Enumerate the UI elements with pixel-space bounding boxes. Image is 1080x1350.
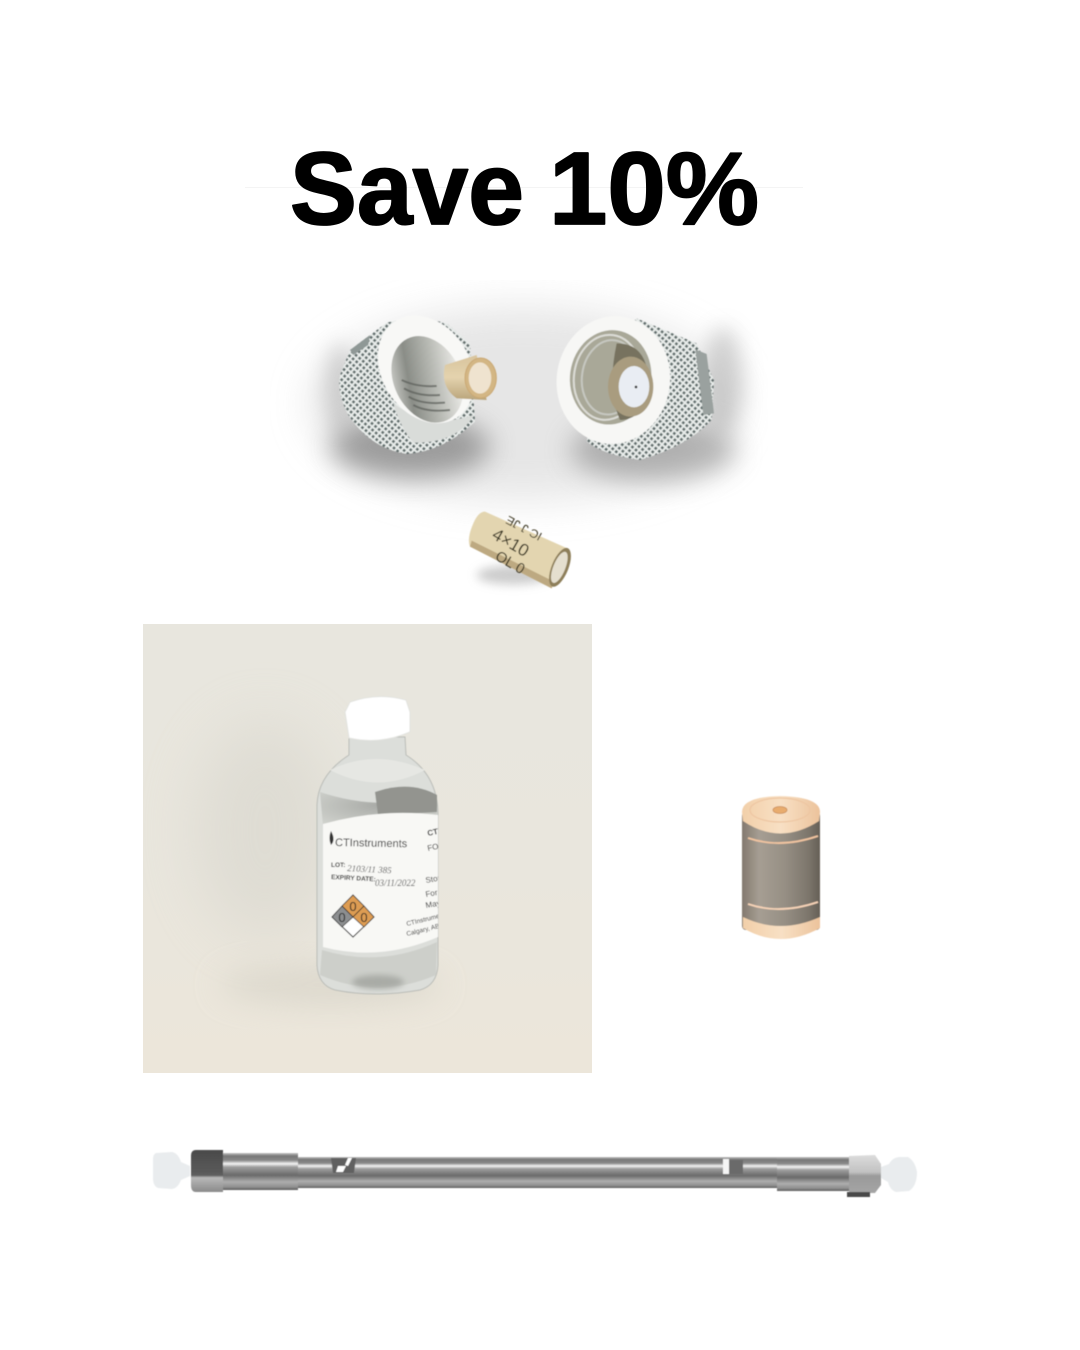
- bottle label: LOT:: [331, 862, 345, 869]
- right sleeve: [777, 1157, 850, 1191]
- photo backdrop: [143, 624, 592, 1073]
- bottle label: EXPIRY DATE:: [331, 874, 376, 883]
- bottle label: May: [425, 898, 441, 910]
- bottle label: CTInstruments: [335, 837, 408, 850]
- bottle label: For: [425, 888, 438, 899]
- loose cartridge: IC J JE: [504, 513, 544, 543]
- product photo: steel guard cartridge: [742, 796, 820, 939]
- bottle label: FORM: [427, 839, 452, 853]
- title: Save: [290, 131, 524, 246]
- hazard diamond: 0: [349, 899, 357, 914]
- column tube: [298, 1157, 778, 1188]
- right clip tab: [847, 1192, 870, 1197]
- bottle shadow: [220, 754, 408, 1002]
- bottom end cap: [743, 917, 820, 939]
- product photo: guard column fittings and cartridge: [310, 297, 743, 590]
- right notch: [723, 1159, 743, 1174]
- right fitting: [548, 309, 714, 460]
- title divider: [245, 187, 803, 188]
- left fitting: [339, 297, 496, 454]
- left end plug: [153, 1152, 190, 1189]
- bottle label: Calgary, AB: [406, 923, 440, 938]
- bottle label: Store: [425, 873, 446, 885]
- loose cartridge: [469, 512, 575, 590]
- hazard diamond: 0: [338, 910, 346, 925]
- right end plug: [881, 1157, 917, 1192]
- hazard diamond: 0: [360, 910, 368, 925]
- product photo: HPLC column: [153, 1150, 917, 1197]
- left sleeve: [222, 1153, 298, 1190]
- title: 10%: [549, 131, 759, 246]
- bottle label: [323, 813, 452, 953]
- product photo: solvent bottle: [143, 624, 592, 1073]
- right hex nut: [849, 1155, 881, 1193]
- copper ring highlights: [748, 836, 818, 843]
- bottle: [317, 696, 452, 994]
- bottle label: CTInstruments: [406, 911, 450, 928]
- bottle label: 2103/11 385: [347, 863, 392, 875]
- bottle label: 03/11/2022: [375, 878, 416, 888]
- left notch: [331, 1158, 356, 1173]
- left hex nut: [191, 1150, 223, 1192]
- bottle cap: [345, 696, 410, 740]
- loose cartridge: OL 0: [492, 548, 527, 578]
- loose cartridge: 4×10: [489, 524, 533, 561]
- hazard diamond: [332, 895, 374, 937]
- bottle label: CTK: [427, 826, 445, 838]
- top end cap: [742, 796, 820, 834]
